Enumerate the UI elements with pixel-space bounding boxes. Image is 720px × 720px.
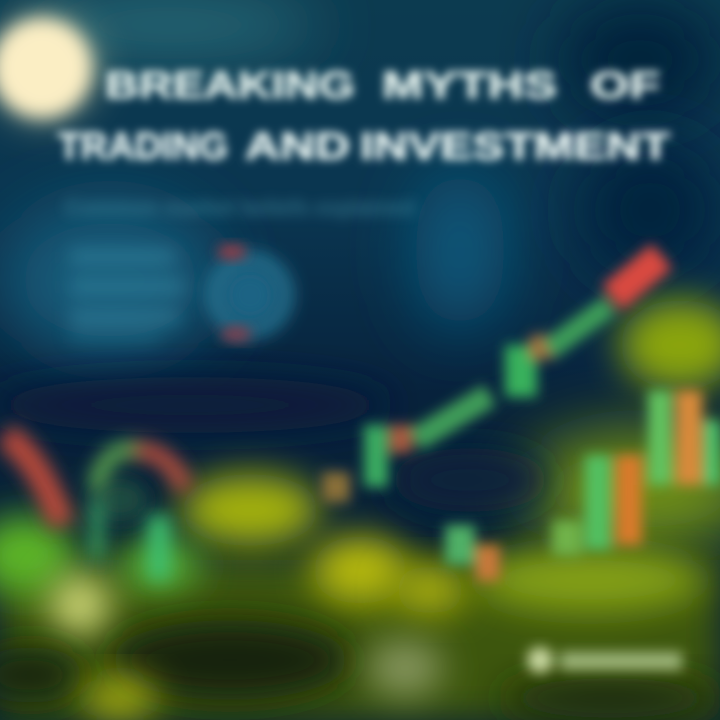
title: AND bbox=[245, 126, 350, 168]
moon bbox=[0, 10, 102, 126]
title: MYTHS bbox=[382, 65, 557, 107]
dark hollow under the chart line bbox=[92, 448, 550, 522]
right foliage glow bbox=[520, 300, 720, 550]
left text block bbox=[70, 250, 185, 340]
title: BREAKING bbox=[105, 65, 355, 107]
bottom foliage bbox=[0, 474, 720, 720]
donut chart bbox=[214, 244, 286, 342]
title: OF bbox=[590, 65, 660, 107]
left candlestick wave bbox=[5, 435, 185, 580]
right candlesticks bbox=[445, 390, 720, 581]
rising chart line bbox=[322, 256, 662, 502]
subtitle: Common market beliefs explained bbox=[65, 195, 415, 220]
title: TRADING bbox=[58, 126, 228, 168]
logo watermark bbox=[527, 647, 682, 673]
title: INVESTMENT bbox=[360, 126, 670, 168]
title bbox=[58, 65, 670, 168]
